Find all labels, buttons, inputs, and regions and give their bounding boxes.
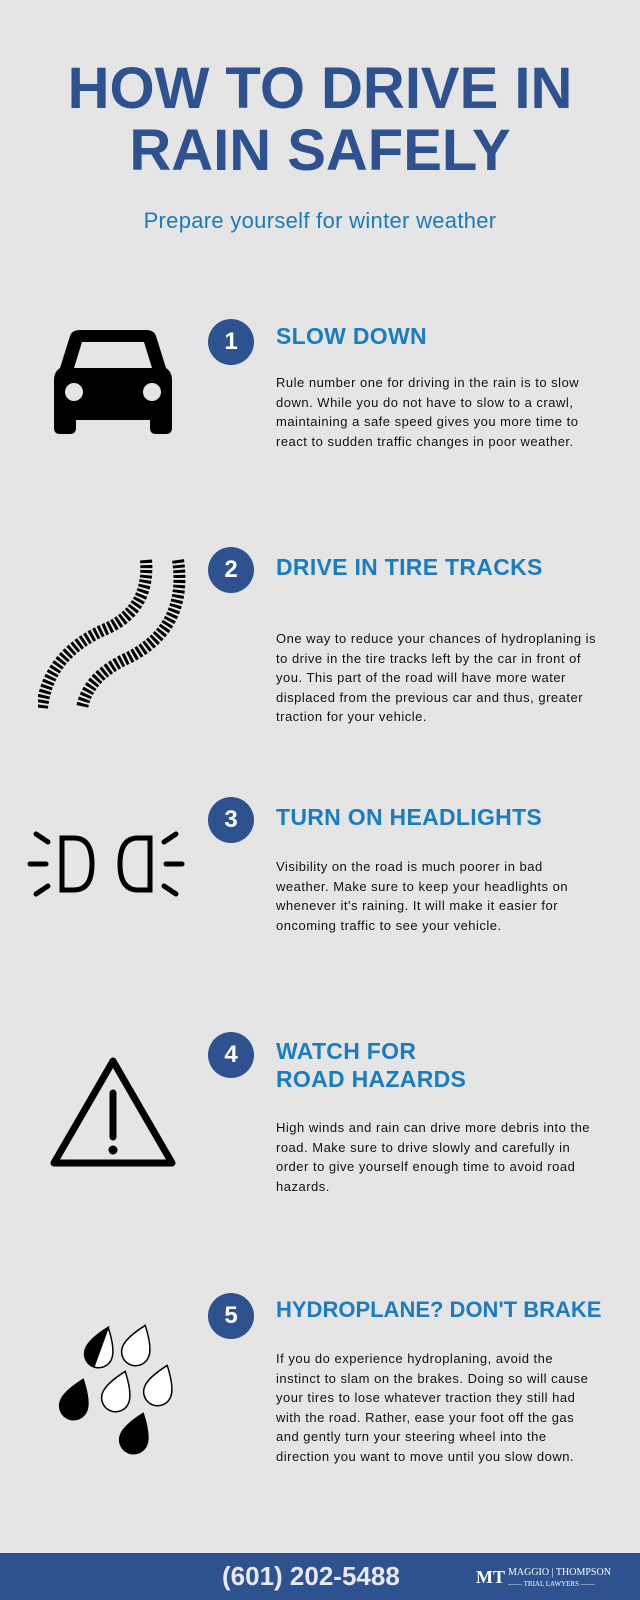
- title: RAIN SAFELY: [129, 118, 511, 183]
- step 5 number: 5: [224, 1302, 238, 1329]
- subtitle: Prepare yourself for winter weather: [144, 208, 496, 233]
- step 5 heading: HYDROPLANE? DON'T BRAKE: [276, 1297, 601, 1322]
- step 2 number: [208, 547, 254, 593]
- step 4 heading: WATCH FOR: [276, 1038, 416, 1064]
- step 3 text: Visibility on the road is much poorer in bad weather. Make sure to keep your headlights on whenever it's raining. It will make it easier for oncoming traffic to see your vehicle.: [276, 859, 568, 932]
- step 1 number: 1: [224, 328, 238, 355]
- icon: tire tracks: [38, 559, 186, 709]
- title: [68, 56, 572, 183]
- icon: rain drops: [58, 1324, 173, 1454]
- step 4 text: High winds and rain can drive more debris into the road. Make sure to drive slowly and carefully in order to give yourself enough time to avoid road hazards.: [276, 1120, 590, 1194]
- step 4 number: [208, 1032, 254, 1078]
- step 4 heading: [276, 1038, 466, 1092]
- step 2 number: 2: [224, 556, 238, 583]
- logo: MT: [476, 1567, 505, 1587]
- step 4 heading: ROAD HAZARDS: [276, 1066, 466, 1092]
- icon: warning triangle: [50, 1058, 176, 1166]
- phone number: (601) 202-5488: [222, 1561, 400, 1591]
- step 3 heading: TURN ON HEADLIGHTS: [276, 804, 542, 830]
- step 1 number: [208, 319, 254, 365]
- step 1 heading: SLOW DOWN: [276, 323, 427, 349]
- logo: [476, 1567, 611, 1588]
- step 1 text: Rule number one for driving in the rain is to slow down. While you do not have to slow to a crawl, maintaining a safe speed gives you more time to react to sudden traffic changes in poor weather.: [276, 375, 579, 448]
- title: HOW TO DRIVE IN: [68, 56, 572, 121]
- step 5 number: [208, 1293, 254, 1339]
- footer: [0, 1553, 640, 1600]
- logo: —— TRIAL LAWYERS ——: [508, 1580, 595, 1588]
- step 4 number: 4: [224, 1041, 238, 1068]
- step 2 text: One way to reduce your chances of hydroplaning is to drive in the tire tracks left by the car in front of you. This part of the road will have more water displaced from the previous car and thus, greater traction for your vehicle.: [276, 631, 596, 724]
- icon: car: [54, 330, 172, 434]
- step 2 heading: DRIVE IN TIRE TRACKS: [276, 554, 543, 580]
- icon: headlights: [28, 832, 184, 896]
- logo: MAGGIO | THOMPSON: [508, 1567, 611, 1578]
- step 5 text: If you do experience hydroplaning, avoid the instinct to slam on the brakes. Doing so will cause your tires to lose whatever traction they still had with the road. Rather, ease your foot off the gas and gently turn your steering wheel into the direction you want to move until you slow down.: [276, 1351, 588, 1464]
- step 3 number: [208, 797, 254, 843]
- step 3 number: 3: [224, 806, 238, 833]
